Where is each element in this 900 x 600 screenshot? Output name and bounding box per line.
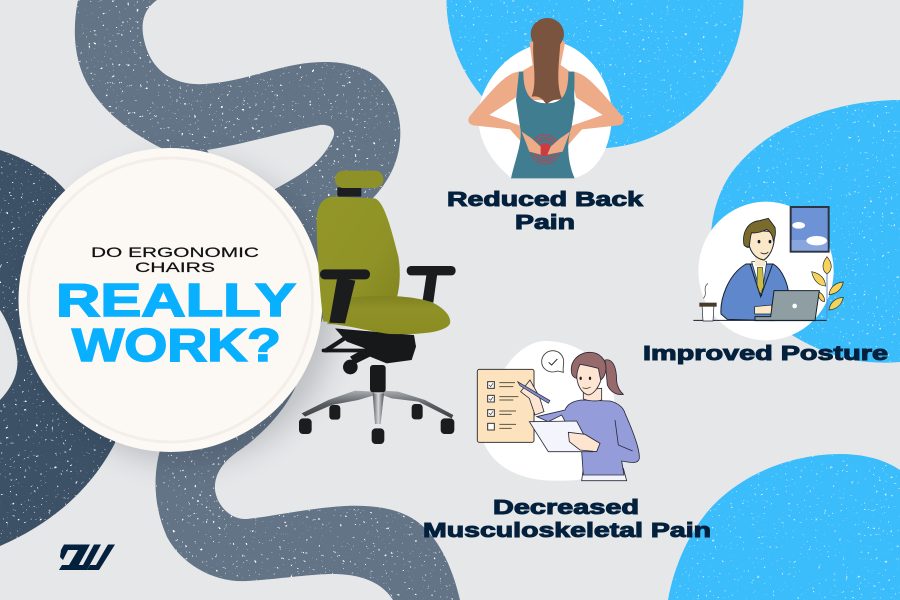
blob: slate winding ribbon — [60, 0, 470, 600]
white blob — [478, 42, 612, 178]
label: decreased musculoskeletal pain — [423, 497, 711, 542]
logo — [59, 544, 115, 570]
face details — [758, 240, 771, 254]
blob: dark navy left — [0, 150, 116, 546]
woman face details — [580, 377, 591, 388]
back skin — [518, 42, 575, 100]
pain marker — [530, 135, 560, 164]
clipboard — [477, 369, 534, 442]
chair mechanism — [322, 328, 416, 374]
label: decreased musculoskeletal pain: Decreased — [493, 497, 639, 519]
chair base — [299, 365, 454, 444]
label: reduced back pain: Pain — [515, 212, 575, 234]
dress — [511, 72, 575, 178]
plant — [812, 257, 843, 320]
label: reduced back pain: Reduced Back — [447, 189, 644, 211]
right armrest — [407, 266, 456, 303]
blob: blue top — [440, 0, 750, 155]
title: small line 2: CHAIRS — [135, 259, 215, 275]
left armrest — [320, 269, 370, 323]
window — [791, 207, 829, 252]
illustration: reduced back pain — [468, 18, 624, 178]
speech bubble — [542, 351, 564, 372]
blob: blue bottom right — [660, 450, 900, 600]
white blob — [698, 202, 834, 340]
laptop — [755, 291, 819, 321]
coffee cup — [699, 283, 717, 321]
blob: blue right — [700, 95, 900, 370]
label: improved posture: Improved Posture — [643, 343, 888, 365]
hands — [522, 132, 570, 155]
woman — [537, 352, 639, 481]
chair headrest — [335, 171, 383, 197]
desk line — [693, 319, 827, 322]
tablet — [529, 421, 593, 452]
label: reduced back pain — [447, 189, 644, 234]
hands and pen — [518, 380, 600, 452]
chair seat — [327, 296, 450, 334]
title: WORK?: WORK? — [72, 319, 281, 371]
arms — [468, 71, 624, 155]
title: REALLY: REALLY — [56, 274, 296, 326]
chair back — [317, 197, 400, 322]
hair — [531, 18, 564, 105]
label: decreased musculoskeletal pain: Musculoskeletal Pain — [423, 520, 711, 542]
illustration: improved posture — [693, 202, 843, 340]
white blob — [483, 341, 619, 481]
man — [721, 218, 788, 321]
ergonomic chair — [299, 171, 456, 444]
title badge — [18, 148, 336, 464]
illustration: decreased pain — [477, 341, 639, 481]
title: small line 1: DO ERGONOMIC — [91, 244, 259, 260]
